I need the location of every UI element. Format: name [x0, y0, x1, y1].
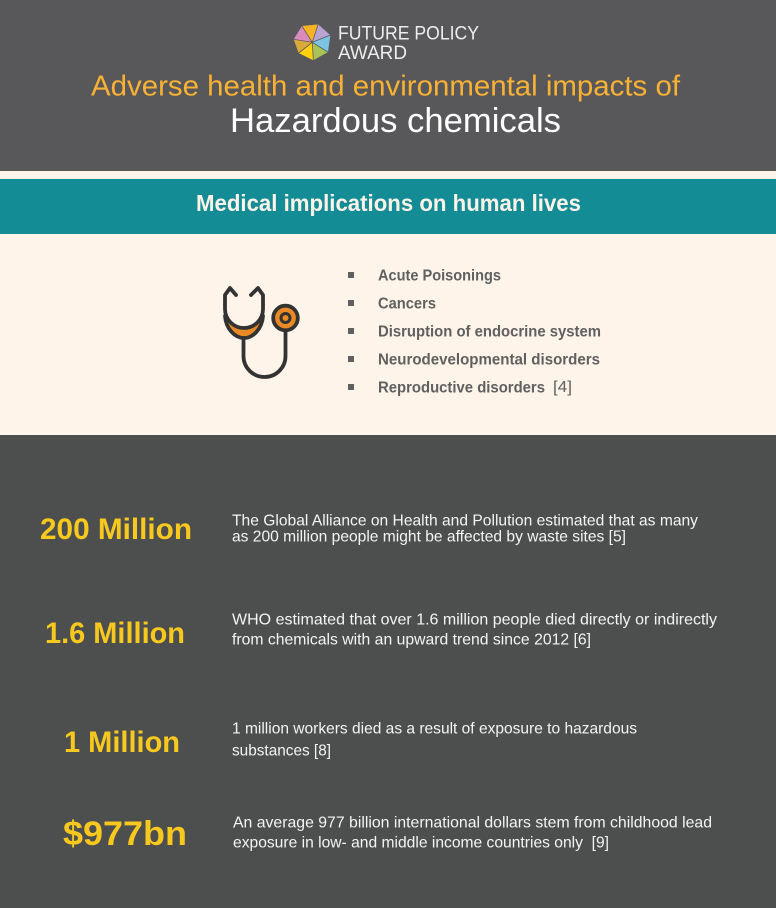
stat: 200 million [40, 512, 698, 546]
stat: 200 million: as 200 million people might be affected by waste sites [5] [232, 528, 626, 546]
icon: future policy award logo [293, 24, 331, 61]
stat: 1 million: substances [8] [232, 742, 331, 760]
stat: 977 billion [63, 814, 712, 853]
stat: 1.6 million: 1.6 Million [45, 617, 185, 650]
logo wordmark [338, 24, 479, 64]
panel: section banner [0, 179, 776, 234]
banner heading: Medical implications on human lives [196, 190, 581, 216]
stat: 200 million: The Global Alliance on Health and Pollution estimated that as many [232, 512, 698, 530]
list item: neurodevelopmental disorders: Neurodevelopmental disorders [378, 352, 600, 368]
title line 2: Hazardous chemicals [230, 102, 561, 140]
stat: 1 million: 1 Million [64, 726, 180, 759]
panel: statistics [0, 435, 776, 908]
stat: 1.6 million [45, 612, 717, 650]
stat: 1.6 million: from chemicals with an upward trend since 2012 [6] [232, 632, 591, 648]
list item: reproductive disorders: [4] [553, 379, 572, 396]
stat: 200 million: 200 Million [40, 513, 192, 546]
stat: 977 billion: An average 977 billion international dollars stem from childhood lead [233, 814, 712, 832]
list item: cancers [348, 296, 436, 312]
list item: disruption of endocrine system: Disruption of endocrine system [378, 324, 601, 340]
title line 1: Adverse health and environmental impacts of [91, 70, 681, 102]
stat: 1 million [64, 720, 637, 760]
logo wordmark: FUTURE POLICY [338, 24, 479, 44]
stat: 977 billion: $977bn [63, 815, 187, 853]
logo wordmark: AWARD [338, 43, 407, 64]
list item: cancers: Cancers [378, 296, 436, 312]
list item: acute poisonings: Acute Poisonings [378, 268, 501, 284]
panel: header [0, 0, 776, 171]
stat: 1.6 million: WHO estimated that over 1.6 million people died directly or indirectly [232, 612, 717, 628]
bullet list: medical implications [348, 268, 601, 396]
icon: stethoscope [225, 288, 298, 377]
list item: reproductive disorders: Reproductive disorders [378, 380, 545, 396]
stat: 977 billion: exposure in low- and middle income countries only [9] [233, 834, 609, 852]
stat: 1 million: 1 million workers died as a result of exposure to hazardous [232, 720, 637, 738]
